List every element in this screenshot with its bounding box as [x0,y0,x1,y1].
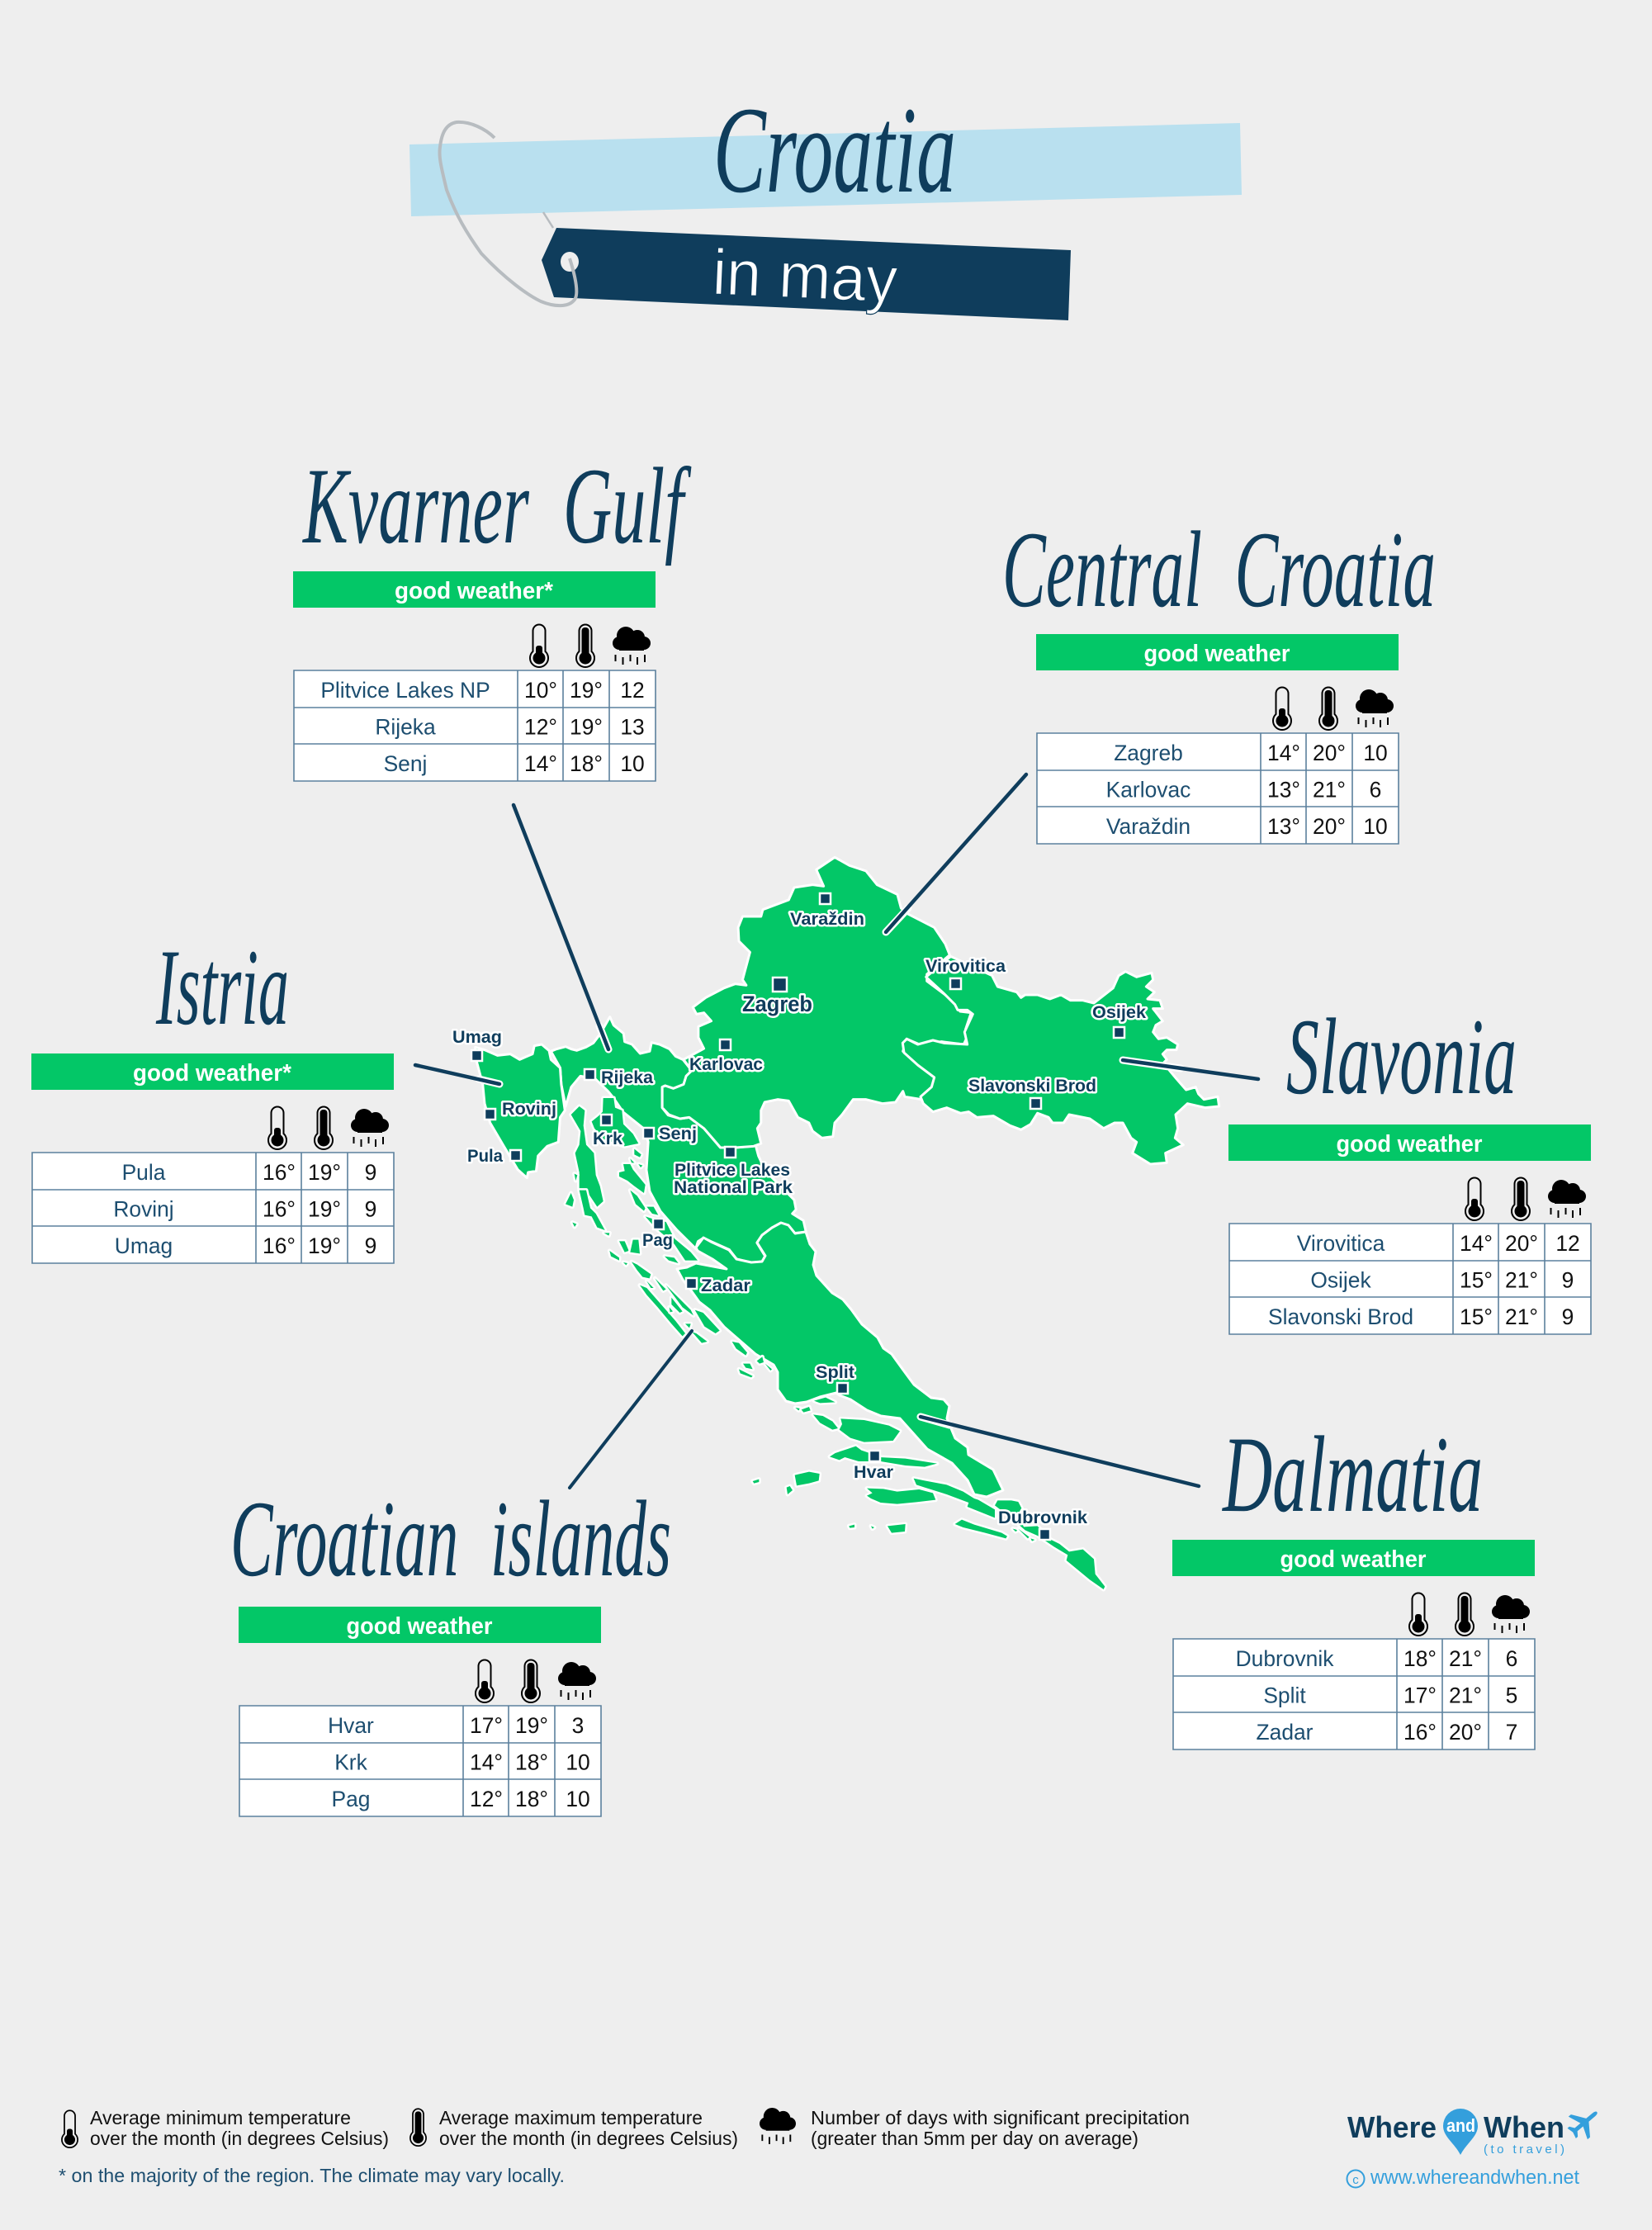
panel: Central Croatia [1002,509,1436,844]
weather table: Central Croatia: 10 [1363,814,1388,839]
weather table: Istria [31,1053,394,1263]
weather table: Istria: 9 [365,1233,376,1258]
leader line: Central Croatia [886,774,1026,932]
panel: Slavonia [1228,996,1591,1334]
city labels: Zadar [701,1276,750,1295]
weather table: Central Croatia: 14° [1267,741,1300,765]
weather table: Slavonia: 21° [1505,1304,1538,1329]
weather table: Istria: good weather* [133,1060,292,1087]
weather table: Slavonia: 12 [1555,1231,1580,1256]
weather table: Croatian islands: 18° [515,1787,548,1811]
title block [409,82,1242,320]
weather table: Istria: 9 [365,1197,376,1222]
city labels: Senj [659,1124,697,1143]
weather table: Slavonia: good weather [1336,1131,1483,1158]
legend text: maximum temperature: over the month (in degrees Celsius) [439,2128,738,2149]
city labels: Varaždin [790,910,864,929]
weather table: Kvarner Gulf: 12° [524,715,557,740]
weather table: Istria: Rovinj [113,1197,174,1222]
weather table: Croatian islands: 12° [470,1787,503,1811]
weather table: Kvarner Gulf: Plitvice Lakes NP [320,678,490,703]
tag string [439,122,576,305]
logo: Where and When: When [1484,2110,1564,2144]
city labels: Umag [452,1028,502,1047]
weather table: Kvarner Gulf: 14° [524,751,557,776]
weather table: Slavonia: 14° [1460,1231,1493,1256]
region: Slavonia [902,956,1219,1164]
city labels: Rijeka [601,1068,653,1087]
weather table: Kvarner Gulf: 13 [620,715,645,740]
weather table: Dalmatia: 6 [1506,1646,1517,1671]
logo: Where and When: Where [1347,2110,1437,2144]
weather table: Kvarner Gulf: Rijeka [375,715,436,740]
logo: Where and When: and [1446,2115,1475,2136]
weather table: Kvarner Gulf: 10° [524,678,557,703]
weather table: Central Croatia: 6 [1370,778,1381,803]
weather table: Dalmatia: good weather [1280,1546,1427,1573]
weather table: Kvarner Gulf: 19° [570,715,603,740]
weather table: Dalmatia: 20° [1449,1720,1482,1745]
weather table: Kvarner Gulf: 18° [570,751,603,776]
weather table: Central Croatia: Karlovac [1106,778,1190,803]
weather table: Central Croatia [1036,634,1399,844]
icon: maximum temperature [410,2109,426,2146]
footnote: * on the majority of the region. The climate may vary locally. [59,2165,565,2186]
weather table: Croatian islands: 18° [515,1750,548,1775]
weather table: Croatian islands: 17° [470,1713,503,1738]
weather table: Istria: 16° [263,1233,296,1258]
legend text: minimum temperature: Average minimum temperature [90,2107,351,2128]
weather table: Dalmatia: Split [1263,1683,1306,1707]
weather table: Kvarner Gulf [293,571,656,781]
weather table: Istria: 16° [263,1197,296,1222]
weather table: Central Croatia: 13° [1267,814,1300,839]
weather table: Dalmatia: 17° [1403,1683,1437,1707]
leader line: Kvarner Gulf [514,805,608,1049]
city labels: Virovitica [925,957,1006,976]
weather table: Dalmatia [1172,1540,1535,1749]
subtitle: in may: in may [711,235,899,316]
weather table: Slavonia: Virovitica [1297,1231,1385,1256]
city labels: Dubrovnik [998,1508,1087,1527]
city labels: Plitvice Lakes [675,1161,790,1180]
heading: Istria: Istria [155,926,289,1048]
weather table: Central Croatia: Varaždin [1106,814,1190,839]
leader line: Slavonia [1123,1060,1258,1079]
weather table: Croatian islands: 14° [470,1750,503,1775]
weather table: Istria: 16° [263,1160,296,1185]
city labels: Zagreb [742,992,812,1016]
city labels: National Park [674,1178,793,1197]
logo: Where and When [1347,2100,1607,2189]
weather table: Kvarner Gulf: 12 [620,678,645,703]
weather table: Istria: 19° [308,1197,341,1222]
city labels: Krk [593,1129,622,1148]
weather table: Dalmatia: 7 [1506,1720,1517,1745]
copyright: www.whereandwhen.net [1370,2166,1579,2189]
city labels: Osijek [1092,1003,1146,1022]
weather table: Istria: 19° [308,1233,341,1258]
islands: northern Adriatic [566,1098,720,1343]
city labels: Slavonski Brod [968,1077,1096,1096]
heading: Dalmatia: Dalmatia [1222,1413,1483,1535]
weather table: Kvarner Gulf: good weather* [395,578,554,604]
weather table: Dalmatia: Zadar [1257,1720,1314,1745]
weather table: Dalmatia: 16° [1403,1720,1437,1745]
icon: minimum temperature [62,2110,78,2147]
panel: Dalmatia [1172,1413,1535,1749]
city labels: Hvar [854,1463,893,1482]
weather table: Central Croatia: 10 [1363,741,1388,765]
weather table: Central Croatia: 20° [1313,741,1346,765]
city labels: Pag [642,1231,673,1250]
legend text: maximum temperature [439,2107,738,2149]
leader line: Dalmatia [921,1417,1199,1486]
copyright: c [1352,2173,1359,2187]
weather table: Croatian islands: 3 [572,1713,584,1738]
weather table: Slavonia: 21° [1505,1268,1538,1293]
weather table: Kvarner Gulf: 10 [620,751,645,776]
city labels [452,910,1146,1527]
icon: plane [1562,2100,1607,2145]
weather table: Dalmatia: 18° [1403,1646,1437,1671]
weather table: Istria: 9 [365,1160,376,1185]
title: Croatia: Croatia [713,82,956,219]
region: Dalmatia [677,1223,1003,1497]
city labels: Rovinj [502,1100,556,1119]
weather table: Slavonia: Osijek [1310,1268,1371,1293]
weather table: Croatian islands: good weather [347,1613,492,1640]
weather table: Central Croatia: good weather [1144,641,1290,667]
legend text: minimum temperature: over the month (in degrees Celsius) [90,2128,389,2149]
weather table: Dalmatia: 21° [1449,1683,1482,1707]
tag hole [561,252,579,272]
panel: Istria [31,926,394,1263]
weather table: Istria: Umag [115,1233,173,1258]
region: Kvarner Gulf [551,1017,806,1262]
weather table: Dalmatia: 5 [1506,1683,1517,1707]
city markers [471,893,1124,1540]
weather table: Croatian islands: 10 [566,1750,590,1775]
weather table: Slavonia: 20° [1505,1231,1538,1256]
legend text: maximum temperature: Average maximum temperature [439,2107,703,2128]
icon: map pin [1443,2109,1478,2155]
weather table: Slavonia: 15° [1460,1268,1493,1293]
city labels: Split [816,1363,854,1382]
weather table: Dalmatia: Dubrovnik [1236,1646,1334,1671]
logo: Where and When: (to travel) [1484,2142,1564,2157]
region: Central Croatia [662,857,971,1148]
map of Croatia [452,857,1219,1589]
weather table: Slavonia: 9 [1562,1304,1574,1329]
title band [409,123,1242,216]
icon: precipitation [760,2108,796,2144]
weather table: Croatian islands: Pag [332,1787,370,1811]
weather table: Kvarner Gulf: Senj [384,751,427,776]
city labels: Karlovac [689,1055,763,1074]
weather table: Kvarner Gulf: 19° [570,678,603,703]
weather table: Slavonia: 9 [1562,1268,1574,1293]
weather table: Central Croatia: 20° [1313,814,1346,839]
region: Istria [476,1044,565,1178]
islands: southern Adriatic [732,1342,1105,1589]
weather table: Slavonia: Slavonski Brod [1268,1304,1413,1329]
legend text: precipitation: Number of days with significant precipitation [811,2107,1190,2128]
weather table: Slavonia [1228,1124,1591,1334]
weather table: Central Croatia: 13° [1267,778,1300,803]
heading: Kvarner Gulf: Kvarner Gulf [302,445,692,566]
panel: Kvarner Gulf [293,445,692,781]
weather table: Croatian islands [239,1607,601,1816]
luggage tag [542,228,1071,320]
legend text: minimum temperature [90,2107,389,2149]
city labels: Pula [467,1147,503,1166]
weather table: Central Croatia: Zagreb [1114,741,1183,765]
weather table: Central Croatia: 21° [1313,778,1346,803]
weather table: Istria: 19° [308,1160,341,1185]
legend [59,2107,1190,2186]
heading: Croatian islands: Croatian islands [230,1478,671,1599]
weather table: Croatian islands: 19° [515,1713,548,1738]
leader line: Istria [415,1065,499,1084]
weather table: Croatian islands: 10 [566,1787,590,1811]
legend text: precipitation [811,2107,1190,2149]
weather table: Istria: Pula [122,1160,166,1185]
panel: Croatian islands [230,1478,671,1816]
weather table: Croatian islands: Hvar [328,1713,374,1738]
weather table: Dalmatia: 21° [1449,1646,1482,1671]
leader line: Croatian islands [570,1331,692,1488]
weather table: Croatian islands: Krk [334,1750,368,1775]
tag string short end [543,212,553,228]
weather table: Slavonia: 15° [1460,1304,1493,1329]
legend text: precipitation: (greater than 5mm per day on average) [811,2128,1138,2149]
